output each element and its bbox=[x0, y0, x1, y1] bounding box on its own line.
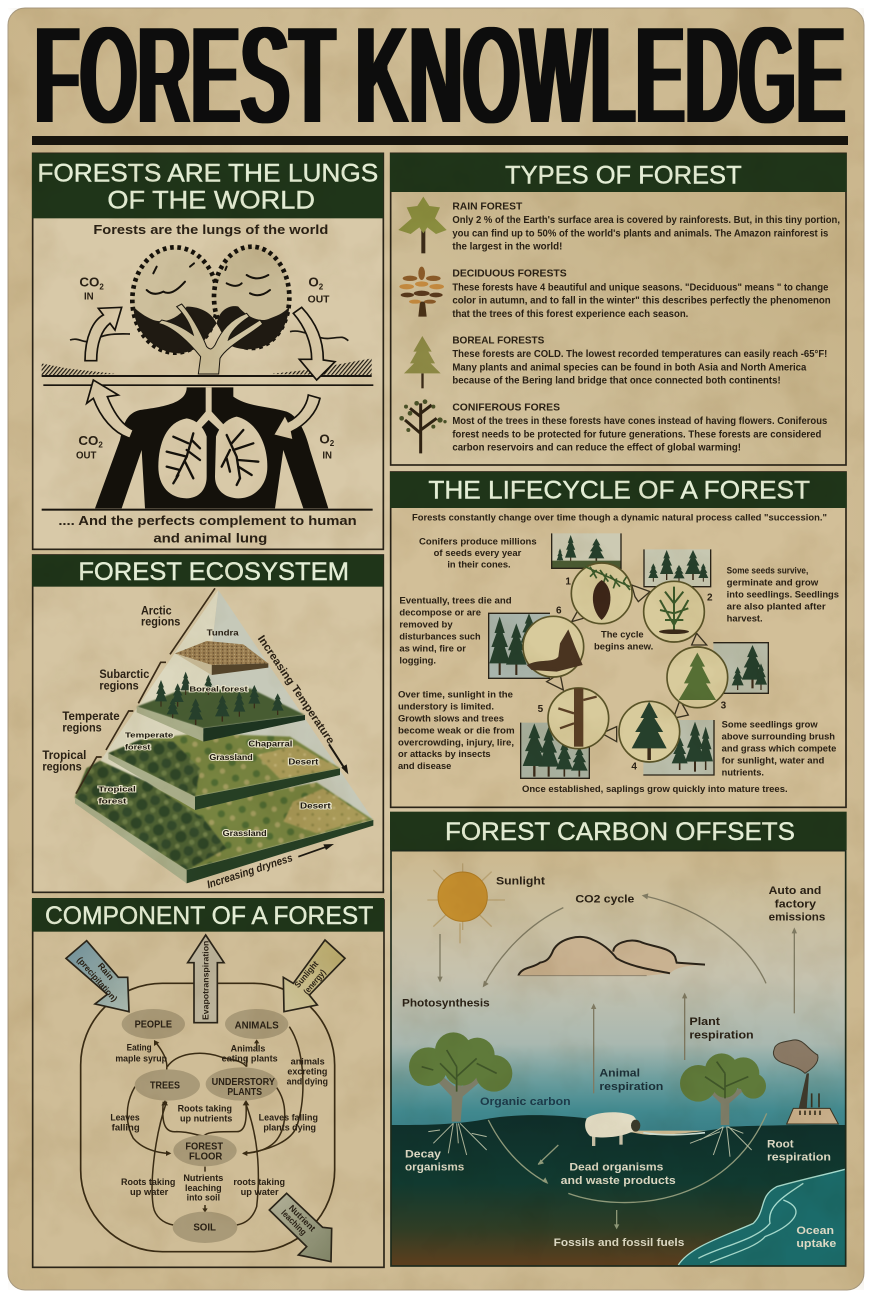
arrow: O2 in bbox=[273, 395, 320, 440]
text: coniferous forest: CONIFEROUS FORES bbox=[452, 403, 560, 414]
panel: the lifecycle of a forest bbox=[390, 472, 847, 807]
text: O2 out bbox=[308, 275, 330, 305]
text: step 2: into seedlings. Seedlings bbox=[727, 589, 839, 599]
heading: ecosystem: FOREST ECOSYSTEM bbox=[78, 558, 349, 586]
labels: regions: Arctic bbox=[141, 603, 172, 617]
text: step 5: overcrowding, injury, lire, bbox=[398, 737, 514, 747]
text: boreal forests: Many plants and animal species can be found in both Asia and North America bbox=[452, 362, 807, 373]
text: rain forest: you can find up to 50% of the world's plants and animals. The Amazon rainforest is bbox=[452, 228, 828, 239]
flow labels: and dying bbox=[287, 1077, 328, 1087]
labels: ground: Root bbox=[767, 1139, 794, 1151]
text: step 2: Some seeds survive, bbox=[727, 565, 808, 575]
node: trees: TREES bbox=[150, 1080, 181, 1091]
flow labels bbox=[110, 1043, 328, 1203]
labels: regions bbox=[42, 603, 180, 773]
heading: lungs bbox=[32, 153, 383, 218]
text: deciduous forests: These forests have 4 beautiful and unique seasons. "Deciduous" means " to change bbox=[452, 282, 829, 293]
closing text bbox=[58, 513, 357, 546]
text: O2 in: IN bbox=[322, 450, 332, 461]
text: step 5 bbox=[398, 690, 515, 771]
heading: lifecycle bbox=[390, 472, 847, 508]
nutrient cycle boundary bbox=[81, 983, 335, 1252]
labels: regions: regions bbox=[99, 678, 139, 692]
intro text: Forests are the lungs of the world bbox=[93, 222, 328, 237]
text: step 5: become weak or die from bbox=[398, 725, 515, 735]
closing text: and animal lung bbox=[153, 531, 267, 546]
icon: sun bbox=[427, 863, 505, 943]
flow labels: up water bbox=[130, 1187, 169, 1197]
arrow: nutrient leaching: leaching bbox=[279, 1208, 309, 1237]
text: CO2 in: CO bbox=[79, 275, 99, 290]
flow labels: eating plants bbox=[222, 1054, 278, 1064]
tier: boreal bbox=[137, 672, 305, 742]
cycle step 6 bbox=[523, 616, 584, 677]
flow labels: plants dying bbox=[263, 1123, 316, 1133]
text: step 3: for sunlight, water and bbox=[722, 755, 825, 765]
cycle arrows in the ground bbox=[488, 1113, 767, 1227]
text: O2 out: 2 bbox=[319, 282, 324, 291]
icon: cloud bbox=[518, 937, 705, 976]
icon: boreal tree bbox=[404, 336, 441, 388]
text: CO2 out bbox=[76, 433, 103, 461]
step numbers: 2 bbox=[707, 592, 713, 603]
centre text: begins anew. bbox=[594, 641, 653, 651]
labels: biomes: forest bbox=[98, 796, 127, 805]
text: step 6 bbox=[399, 595, 512, 665]
node: animals: ANIMALS bbox=[235, 1020, 279, 1031]
labels: atmosphere: Sunlight bbox=[496, 875, 545, 887]
step numbers: 6 bbox=[556, 606, 562, 617]
flow labels: roots taking bbox=[233, 1177, 285, 1187]
flow labels: into soil bbox=[187, 1193, 220, 1203]
illustration: human lungs bbox=[95, 387, 328, 508]
text: CO2 out: CO bbox=[78, 433, 98, 448]
text: O2 in: 2 bbox=[330, 439, 335, 448]
arrow: sunlight: (energy) bbox=[301, 967, 328, 996]
step numbers: 3 bbox=[721, 701, 727, 712]
divider lines bbox=[42, 375, 373, 386]
flow labels: leaching bbox=[185, 1183, 222, 1193]
arrow: evapotranspiration bbox=[188, 935, 224, 1023]
flow labels: animals bbox=[291, 1056, 325, 1066]
text: step 5: understory is limited. bbox=[398, 701, 494, 711]
text: boreal forests: BOREAL FORESTS bbox=[452, 336, 544, 347]
text: boreal forests: because of the Bering land bridge that once connected both continents! bbox=[452, 376, 781, 387]
axis: increasing dryness: Increasing dryness bbox=[206, 852, 294, 891]
text: step 2: harvest. bbox=[727, 613, 763, 623]
text: step 6: removed by bbox=[399, 619, 453, 629]
icon: coniferous tree bbox=[399, 399, 447, 453]
text: step 4: Once established, saplings grow quickly into mature trees. bbox=[522, 784, 788, 794]
node: animals bbox=[225, 1009, 288, 1039]
tier: tundra bbox=[175, 641, 268, 675]
flow labels: Roots taking bbox=[121, 1177, 176, 1187]
heading: carbon bbox=[390, 812, 847, 850]
text: step 6: Eventually, trees die and bbox=[399, 595, 512, 605]
labels: biomes: Tropical bbox=[98, 785, 136, 794]
cycle step 4 bbox=[619, 701, 680, 762]
flow arrowheads bbox=[154, 1039, 259, 1213]
flow labels: Leaves falling bbox=[259, 1113, 318, 1123]
scene: ground bbox=[391, 1115, 846, 1266]
closing text: .... And the perfects complement to human bbox=[58, 513, 357, 528]
labels: biomes: Grassland bbox=[223, 829, 267, 838]
labels: atmosphere: factory bbox=[775, 898, 817, 910]
labels: biomes: Tundra bbox=[207, 629, 239, 638]
labels: ground: Ocean bbox=[796, 1225, 834, 1237]
scene: white stream bbox=[643, 1133, 705, 1135]
tier: temperate bbox=[108, 733, 340, 810]
region brackets bbox=[76, 588, 215, 794]
text: deciduous forests: that the trees of this forest experience each season. bbox=[452, 309, 689, 320]
illustration: tree bbox=[42, 247, 372, 375]
node: trees bbox=[135, 1069, 200, 1101]
cycle step 5 bbox=[548, 688, 609, 749]
axis: increasing temperature bbox=[255, 633, 348, 774]
intro text: Forests constantly change over time though a dynamic natural process called "succession." bbox=[412, 513, 827, 523]
flow arrows bbox=[127, 1027, 303, 1225]
baseline bbox=[42, 509, 373, 511]
vignette 6 bbox=[489, 613, 550, 678]
arrow: sunlight: Sunlight bbox=[292, 959, 320, 990]
cycle arrowheads bbox=[437, 893, 797, 1009]
arrow: nutrient leaching: Nutrient bbox=[287, 1203, 318, 1233]
labels: regions: Subarctic bbox=[99, 667, 149, 681]
tree: left bbox=[409, 1032, 512, 1155]
labels: ground bbox=[405, 1139, 836, 1250]
text: CO2 in: IN bbox=[84, 291, 94, 302]
text: step 5: or attacks by insects bbox=[398, 749, 491, 759]
labels: ground: uptake bbox=[796, 1238, 836, 1250]
text: step 2: germinate and grow bbox=[727, 577, 819, 587]
cycle step 3 bbox=[667, 647, 728, 708]
text: step 5: Growth slows and trees bbox=[398, 713, 504, 723]
arrow: rain: Rain bbox=[96, 961, 116, 982]
text: rain forest bbox=[452, 201, 840, 253]
panel: component of a forest bbox=[32, 898, 384, 1267]
vignette 4 bbox=[643, 720, 714, 775]
tree: right bbox=[680, 1053, 766, 1157]
labels: biomes: Grassland bbox=[209, 753, 253, 762]
flow labels: Roots taking bbox=[178, 1104, 232, 1114]
flow labels: maple syrup bbox=[115, 1053, 167, 1063]
heading: lungs: OF THE WORLD bbox=[107, 186, 315, 214]
labels: ground: Fossils and fossil fuels bbox=[554, 1237, 684, 1249]
labels: atmosphere bbox=[402, 875, 825, 1108]
labels: biomes: Temperate bbox=[125, 731, 173, 740]
centre text: The cycle bbox=[601, 630, 644, 640]
labels: ground: Decay bbox=[405, 1148, 442, 1160]
heading: types: TYPES OF FOREST bbox=[505, 161, 742, 189]
text: step 6: logging. bbox=[399, 655, 436, 665]
node: understory plants: UNDERSTORY bbox=[212, 1077, 276, 1088]
text: coniferous forest: forest needs to be protected for future generations. These forests are considered bbox=[452, 429, 821, 440]
labels: atmosphere: CO2 cycle bbox=[575, 894, 634, 906]
cycle arrows in the sky bbox=[440, 896, 794, 1093]
step numbers: 5 bbox=[538, 704, 544, 715]
labels: atmosphere: Plant bbox=[689, 1016, 720, 1028]
node: soil: SOIL bbox=[193, 1223, 216, 1234]
text: step 3: nutrients. bbox=[722, 767, 764, 777]
cycle step 1 bbox=[571, 563, 632, 624]
panel frame bbox=[391, 851, 846, 1266]
panel: forest carbon offsets bbox=[390, 812, 847, 1266]
flow labels: falling bbox=[112, 1123, 140, 1133]
node: understory plants: PLANTS bbox=[227, 1087, 262, 1098]
arrow: sunlight bbox=[283, 940, 345, 1012]
icon: factory bbox=[773, 1040, 838, 1124]
labels: atmosphere: Auto and bbox=[769, 885, 821, 897]
node: understory plants bbox=[206, 1067, 278, 1101]
labels: ground: Dead organisms bbox=[569, 1162, 663, 1174]
text: step 3: above surrounding brush bbox=[722, 731, 835, 741]
arrow: O2 out bbox=[293, 307, 335, 380]
text: step 3: Some seedlings grow bbox=[722, 720, 818, 730]
arrow: rain bbox=[66, 941, 129, 1012]
labels: biomes: Desert bbox=[300, 801, 331, 810]
text: O2 out: O bbox=[308, 275, 319, 290]
node: forest floor bbox=[173, 1135, 237, 1166]
panel: types of forest bbox=[390, 153, 847, 465]
arrow: CO2 out bbox=[87, 380, 133, 438]
text: deciduous forests: color in autumn, and to fall in the winter" this describes perfectly the phenomenon bbox=[452, 296, 831, 307]
labels: biomes bbox=[98, 629, 331, 838]
labels: ground: organisms bbox=[405, 1162, 464, 1174]
text: step 1: of seeds every year bbox=[434, 548, 522, 558]
labels: biomes: Boreal forest bbox=[189, 685, 248, 694]
text: O2 out: OUT bbox=[308, 294, 330, 305]
labels: atmosphere: Animal bbox=[599, 1068, 640, 1080]
scene: ocean bbox=[678, 1169, 846, 1266]
flow labels: up water bbox=[241, 1187, 279, 1197]
labels: atmosphere: respiration bbox=[599, 1081, 663, 1093]
node: forest floor: FOREST bbox=[185, 1141, 223, 1152]
heading: component: COMPONENT OF A FOREST bbox=[45, 902, 373, 930]
text: coniferous forest: Most of the trees in these forests have cones instead of having flowers. Coniferous bbox=[452, 416, 827, 427]
labels: biomes: Desert bbox=[288, 757, 319, 766]
flow labels: Leaves bbox=[110, 1113, 140, 1123]
vignette 3 bbox=[713, 643, 768, 693]
pyramid bbox=[75, 590, 373, 883]
labels: atmosphere: emissions bbox=[769, 912, 825, 924]
node: people: PEOPLE bbox=[135, 1020, 173, 1031]
text: CO2 in: 2 bbox=[99, 282, 104, 291]
text: step 6: decompose or are bbox=[399, 607, 481, 617]
flow labels: up nutrients bbox=[180, 1114, 232, 1124]
labels: regions: regions bbox=[141, 615, 180, 629]
labels: regions: Temperate bbox=[62, 709, 120, 723]
text: rain forest: RAIN FOREST bbox=[452, 201, 523, 212]
text: step 3: and grass which compete bbox=[722, 743, 836, 753]
labels: regions: regions bbox=[42, 759, 82, 773]
text: CO2 out: 2 bbox=[98, 441, 103, 450]
text: step 1: Conifers produce millions bbox=[419, 536, 537, 546]
text: CO2 out: OUT bbox=[76, 450, 96, 461]
tier: tropical bbox=[75, 761, 373, 883]
text: step 1 bbox=[419, 536, 537, 570]
step numbers bbox=[538, 576, 727, 772]
text: step 2 bbox=[727, 565, 839, 623]
text: CO2 in bbox=[79, 275, 104, 302]
labels: regions: Tropical bbox=[42, 748, 86, 762]
flow labels: Nutrients bbox=[183, 1173, 223, 1183]
vignette 2 bbox=[644, 549, 711, 587]
heading: lungs: FORESTS ARE THE LUNGS bbox=[37, 160, 378, 188]
text: step 1: in their cones. bbox=[447, 560, 511, 570]
arrow: nutrient leaching bbox=[269, 1193, 332, 1262]
icon: sheep bbox=[585, 1112, 640, 1146]
vignette 5 bbox=[521, 723, 589, 778]
text: rain forest: the largest in the world! bbox=[452, 242, 562, 253]
axis: increasing temperature: Increasing Temperature bbox=[255, 633, 337, 746]
node: forest floor: FLOOR bbox=[189, 1151, 222, 1162]
labels: atmosphere: Organic carbon bbox=[480, 1096, 571, 1108]
ground arrowheads bbox=[538, 1159, 619, 1229]
step numbers: 4 bbox=[631, 761, 637, 772]
centre text bbox=[594, 630, 653, 651]
labels: ground: respiration bbox=[767, 1152, 831, 1164]
text: step 6: disturbances such bbox=[399, 631, 481, 641]
arrow: rain: (precipitation) bbox=[75, 955, 120, 1004]
heading: lifecycle: THE LIFECYCLE OF A FOREST bbox=[428, 476, 810, 504]
vignette panels bbox=[489, 533, 768, 778]
panel: forest ecosystem bbox=[32, 555, 383, 892]
text: coniferous forest: carbon reservoirs and can reduce the effect of global warming! bbox=[452, 443, 741, 454]
heading: types bbox=[390, 153, 847, 192]
labels: atmosphere: respiration bbox=[689, 1029, 754, 1041]
cycle step 2 bbox=[644, 581, 704, 642]
labels: ground: and waste products bbox=[561, 1175, 676, 1187]
labels: atmosphere: Photosynthesis bbox=[402, 997, 490, 1009]
icon: deciduous tree bbox=[399, 267, 444, 317]
text: step 5: and disease bbox=[398, 761, 451, 771]
node: people bbox=[122, 1009, 185, 1039]
text: step 5: Over time, sunlight in the bbox=[398, 690, 513, 700]
text: boreal forests: These forests are COLD. The lowest recorded temperatures can easily reach -65°F! bbox=[452, 349, 827, 360]
scene: sky bbox=[391, 851, 846, 1131]
text: coniferous forest bbox=[452, 403, 827, 454]
labels: biomes: forest bbox=[125, 742, 151, 751]
text: deciduous forests bbox=[452, 269, 831, 320]
cycle connectors bbox=[547, 585, 707, 742]
vignette 1 bbox=[552, 533, 621, 568]
text: O2 in bbox=[319, 431, 335, 461]
step numbers: 1 bbox=[565, 576, 571, 587]
flow labels: excreting bbox=[287, 1067, 328, 1077]
flow labels: Eating bbox=[127, 1043, 152, 1053]
labels: biomes: Chaparral bbox=[248, 740, 292, 749]
arrow: CO2 in bbox=[85, 307, 122, 361]
icon: rain forest tree bbox=[398, 197, 447, 253]
text: step 6: as wind, fire or bbox=[399, 643, 466, 653]
heading: ecosystem bbox=[32, 555, 383, 587]
text: O2 in: O bbox=[319, 431, 330, 446]
node: soil bbox=[173, 1212, 237, 1243]
flow labels: Animals bbox=[231, 1044, 265, 1054]
arrow: evapotranspiration: Evapotranspiration bbox=[201, 941, 211, 1020]
text: step 3 bbox=[722, 720, 836, 777]
text: step 2: are also planted after bbox=[727, 601, 826, 611]
labels: regions: regions bbox=[62, 720, 102, 734]
text: rain forest: Only 2 % of the Earth's surface area is covered by rainforests. But, in this tiny portion, bbox=[452, 215, 840, 226]
axis: increasing dryness bbox=[206, 844, 334, 891]
text: deciduous forests: DECIDUOUS FORESTS bbox=[452, 269, 567, 280]
panel: forests are the lungs of the world bbox=[32, 153, 383, 549]
text: boreal forests bbox=[452, 336, 827, 387]
heading: carbon: FOREST CARBON OFFSETS bbox=[445, 818, 795, 846]
